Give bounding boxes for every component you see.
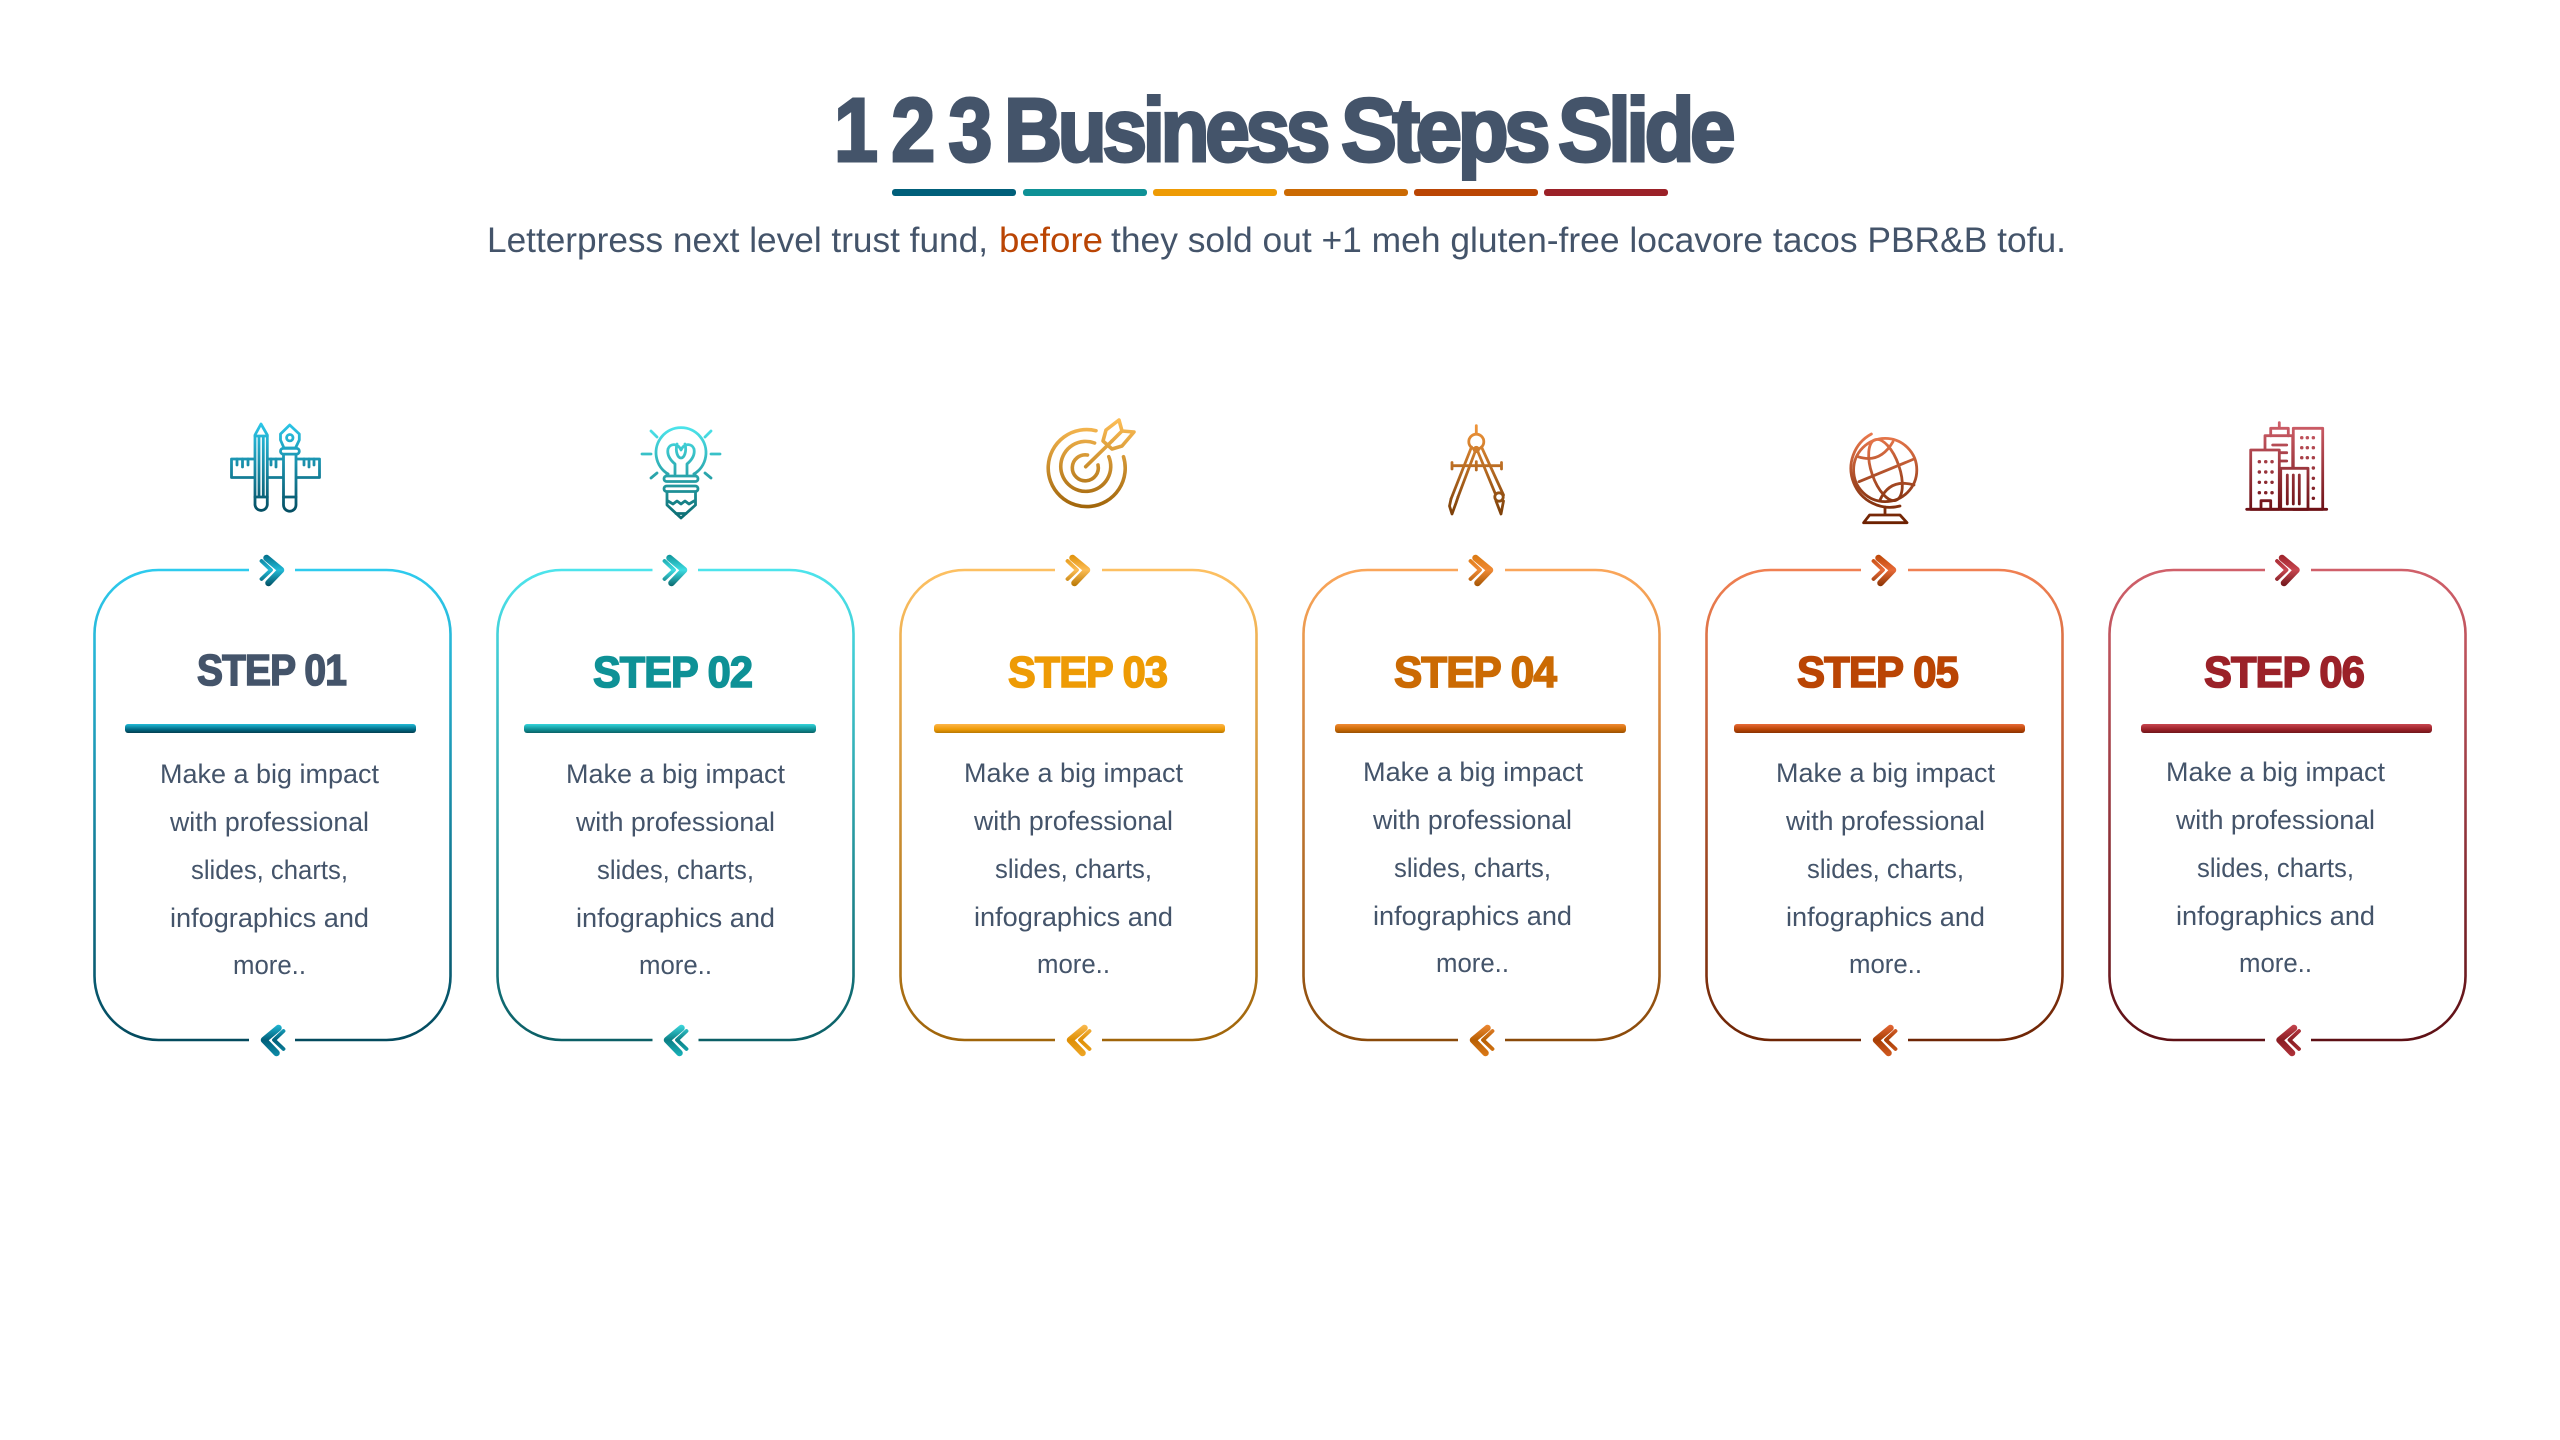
body text: slides, charts, bbox=[995, 854, 1152, 884]
body text: Make a big impact bbox=[1776, 758, 1995, 788]
divider bar bbox=[1335, 724, 1626, 733]
icon: ruler, pencil and pen bbox=[232, 424, 320, 511]
body text: infographics and bbox=[2176, 901, 2375, 931]
title: 1 2 3 bbox=[834, 81, 990, 181]
body text bbox=[964, 758, 1183, 979]
icon: light bulb pencil bbox=[642, 428, 720, 518]
body text: more.. bbox=[233, 950, 306, 980]
divider bar bbox=[524, 724, 816, 733]
body text: more.. bbox=[1436, 948, 1509, 978]
body text: more.. bbox=[1037, 949, 1110, 979]
card outline bbox=[1304, 570, 1660, 1040]
body text bbox=[566, 759, 785, 980]
card outline bbox=[2110, 570, 2466, 1040]
body text: infographics and bbox=[1373, 901, 1572, 931]
chevron top bbox=[1470, 558, 1490, 583]
body text: with professional bbox=[575, 807, 775, 837]
step heading: STEP 06 bbox=[2204, 648, 2364, 697]
body text: with professional bbox=[169, 807, 369, 837]
icon: city buildings bbox=[2247, 423, 2327, 509]
icon: drawing compass bbox=[1450, 426, 1504, 514]
subtitle bbox=[487, 221, 2066, 260]
body text: with professional bbox=[973, 806, 1173, 836]
chevron bottom bbox=[667, 1028, 686, 1053]
panel: step 06 bbox=[2110, 423, 2466, 1053]
panel: step 02 bbox=[498, 428, 854, 1053]
body text: more.. bbox=[639, 950, 712, 980]
step heading: STEP 02 bbox=[593, 648, 752, 697]
body text: infographics and bbox=[1786, 902, 1985, 932]
panel: step 01 bbox=[94, 424, 450, 1053]
body text: Make a big impact bbox=[566, 759, 785, 789]
card outline bbox=[1706, 570, 2062, 1040]
colour bars under title bbox=[892, 189, 1668, 196]
title bbox=[834, 81, 1733, 181]
body text: Make a big impact bbox=[2166, 757, 2385, 787]
chevron top bbox=[262, 558, 281, 583]
panel: step 05 bbox=[1706, 434, 2062, 1053]
divider bar bbox=[2141, 724, 2432, 733]
body text: Make a big impact bbox=[964, 758, 1183, 788]
divider bar bbox=[125, 724, 416, 733]
subtitle: before bbox=[999, 221, 1103, 260]
chevron bottom bbox=[1070, 1028, 1090, 1053]
subtitle: Letterpress next level trust fund, bbox=[487, 221, 988, 260]
panel: step 04 bbox=[1304, 426, 1660, 1053]
chevron top bbox=[1068, 558, 1087, 583]
body text: Make a big impact bbox=[1363, 757, 1583, 787]
panel: step 03 bbox=[900, 420, 1256, 1053]
divider bar bbox=[934, 724, 1225, 733]
body text: more.. bbox=[1849, 949, 1922, 979]
icon: globe on stand bbox=[1851, 434, 1917, 523]
chevron bottom bbox=[2280, 1028, 2299, 1053]
icon: target with arrow bbox=[1048, 420, 1134, 507]
chevron top bbox=[664, 558, 684, 583]
body text bbox=[2166, 757, 2385, 978]
step heading: STEP 03 bbox=[1008, 648, 1167, 697]
step heading: STEP 04 bbox=[1394, 648, 1557, 697]
body text: slides, charts, bbox=[191, 855, 348, 885]
body text: infographics and bbox=[576, 903, 775, 933]
body text: infographics and bbox=[974, 902, 1173, 932]
divider bar bbox=[1734, 724, 2025, 733]
title: Business bbox=[1004, 81, 1328, 181]
body text: Make a big impact bbox=[160, 759, 379, 789]
body text: with professional bbox=[2175, 805, 2375, 835]
chevron top bbox=[1874, 558, 1893, 583]
chevron bottom bbox=[1876, 1028, 1896, 1053]
body text: slides, charts, bbox=[2197, 853, 2354, 883]
body text bbox=[1776, 758, 1995, 979]
card outline bbox=[498, 570, 854, 1040]
chevron bottom bbox=[264, 1028, 284, 1053]
body text bbox=[1363, 757, 1583, 978]
body text: with professional bbox=[1372, 805, 1572, 835]
subtitle: they sold out +1 meh gluten-free locavore tacos PBR&B tofu. bbox=[1111, 221, 2066, 260]
body text: slides, charts, bbox=[1807, 854, 1964, 884]
step heading: STEP 01 bbox=[197, 646, 346, 695]
body text: with professional bbox=[1785, 806, 1985, 836]
body text: slides, charts, bbox=[597, 855, 754, 885]
body text: more.. bbox=[2239, 948, 2312, 978]
step heading: STEP 05 bbox=[1797, 648, 1959, 697]
chevron top bbox=[2277, 558, 2296, 583]
chevron bottom bbox=[1473, 1028, 1492, 1053]
card outline bbox=[94, 570, 450, 1040]
title: Steps bbox=[1341, 81, 1548, 181]
body text: slides, charts, bbox=[1394, 853, 1551, 883]
card outline bbox=[900, 570, 1256, 1040]
body text bbox=[160, 759, 379, 980]
body text: infographics and bbox=[170, 903, 369, 933]
title: Slide bbox=[1558, 81, 1733, 181]
